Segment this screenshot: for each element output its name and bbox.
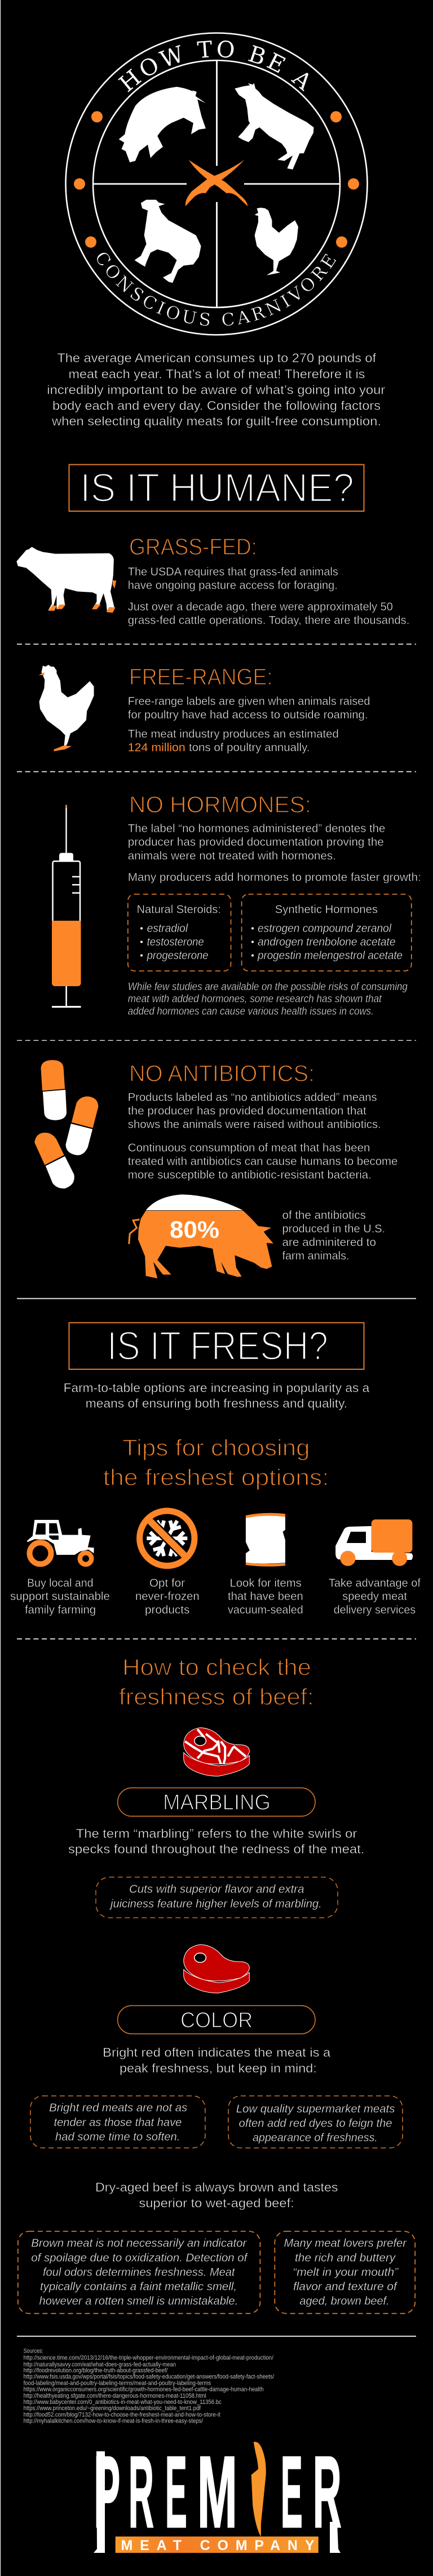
caption: Opt for (149, 1577, 185, 1589)
icon: hen (39, 665, 94, 751)
text block: sources: http://naturallysavvy.com/eat/what-does-grass-fed-actually-mean (24, 2361, 176, 2368)
icon: sheep (135, 200, 201, 283)
caption (329, 1577, 421, 1616)
caption (10, 1577, 110, 1616)
callout: bright red meats: Bright red meats are not as (49, 2102, 187, 2115)
callout: marbling note (96, 1877, 338, 1918)
text block: hormone risks note (128, 981, 408, 1017)
text block: hormone risks note: added hormones can cause various health issues in cows. (128, 1005, 374, 1017)
panel: marbling (68, 1727, 364, 1918)
caption: Take advantage of (329, 1577, 421, 1589)
callout: natural steroids (128, 894, 231, 971)
intro text: incredibly important to be aware of what’s going into your (47, 383, 385, 397)
text block: sources: http://food52.com/blog/7132-how-to-choose-the-freshest-meat-and-how-to-store-it (24, 2411, 220, 2418)
icon: red steak (184, 1945, 249, 1993)
text block: antibiotics copy: treated with antibiotics can cause humans to become (128, 1155, 397, 1168)
text block: pig stat: are adminitered to (282, 1237, 376, 1249)
chart: pig 80 percent: 80% (170, 1216, 219, 1243)
text block: hormone risks note: meat with added hormones, some research has shown that (128, 994, 382, 1005)
text block: color copy (103, 2046, 331, 2075)
text block: free-range copy: The meat industry produces an estimated (128, 728, 339, 740)
logo: premier meat company: R (313, 2435, 342, 2548)
icon: hen (255, 208, 298, 275)
heading: is it humane: IS IT HUMANE? (80, 466, 354, 511)
text block: sources: http://myhalalkitchen.com/how-to-know-if-meat-is-fresh-in-three-easy-steps/ (24, 2418, 204, 2425)
intro text (47, 351, 385, 428)
icon: pills (34, 1060, 98, 1189)
heading: how to check: freshness of beef: (119, 1684, 314, 1710)
text block: free-range copy (128, 695, 370, 754)
text block: marbling copy: The term “marbling” refers to the white swirls or (76, 1826, 357, 1840)
text block: hormone risks note: While few studies are available on the possible risks of consuming (128, 981, 408, 993)
icon: delivery truck (335, 1519, 413, 1566)
title: conscious carnivore: CONSCIOUS CARNIVORE (97, 253, 336, 326)
text block: antibiotics copy: Products labeled as “no antibiotics added” means (128, 1092, 377, 1104)
title: how to be a: HOW TO BE A (118, 41, 309, 93)
text block: sources (24, 2348, 275, 2425)
callout: natural steroids: testosterone (147, 936, 204, 948)
callout: natural steroids: estradiol (147, 922, 188, 935)
caption: that have been (228, 1590, 303, 1603)
callout: synthetic hormones: androgen trenbolone acetate (258, 936, 396, 948)
text block: pig stat: farm animals. (282, 1250, 350, 1263)
callout: synthetic hormones: progestin melengestrol acetate (257, 949, 403, 962)
caption: Look for items (230, 1577, 302, 1589)
callout: brown meat: Brown meat is not necessarily an indicator (31, 2237, 248, 2250)
text block: sources: http://healthyeating.sfgate.com/there-dangerous-hormones-meat-11058.html (24, 2393, 206, 2399)
callout: meat lovers: flavor and texture of (293, 2280, 398, 2293)
text block: antibiotics copy: shows the animals were raised without antibiotics. (128, 1118, 381, 1131)
caption: products (145, 1604, 189, 1616)
intro text: body each and every day. Consider the following factors (52, 399, 381, 413)
logo: premier meat company: E (165, 2436, 187, 2549)
text block: sources: http://www.babycenter.com/0_antibiotics-in-meat-what-you-need-to-know_11356.bc (24, 2399, 222, 2406)
icon: cow (235, 83, 313, 169)
icon: pig (119, 87, 206, 162)
heading: grass-fed: GRASS-FED: (129, 534, 257, 560)
text block: free-range copy: Free-range labels are given when animals raised (128, 695, 370, 707)
intro text: The average American consumes up to 270 pounds of (57, 351, 377, 365)
icon: knife as letter I (251, 2442, 266, 2537)
text block: hormones copy: animals were not treated with hormones. (128, 850, 336, 862)
icon: cow (16, 547, 116, 613)
heading: is it fresh: IS IT FRESH? (107, 1324, 328, 1369)
caption: speedy meat (342, 1590, 407, 1603)
caption: vacuum-sealed (228, 1604, 303, 1616)
text block: sources: https://www.princeton.edu/~greening/downloads/antibiotic_table_tent1.pdf (24, 2405, 201, 2412)
label: color: COLOR (180, 2008, 253, 2032)
label: marbling (118, 1788, 315, 1816)
intro text: meat each year. That’s a lot of meat! Therefore it is (69, 367, 365, 381)
text block: farm-to-table: Farm-to-table options are increasing in popularity as a (64, 1381, 370, 1395)
text block: antibiotics copy (128, 1092, 397, 1181)
logo: premier meat company: MEAT COMPANY (121, 2538, 315, 2553)
callout: brown meat: however a rotten smell is unmistakable. (39, 2295, 238, 2307)
callout: low quality meats (228, 2096, 403, 2148)
caption: support sustainable (10, 1590, 110, 1603)
text block: color copy: Bright red often indicates the meat is a (103, 2046, 331, 2060)
caption: never-frozen (135, 1590, 200, 1603)
text block: sources: Sources: (24, 2348, 43, 2355)
icon: crossed knives and animals (119, 83, 313, 283)
panel: grass-fed (16, 534, 409, 627)
text block: marbling copy: specks found throughout the redness of the meat. (68, 1842, 364, 1856)
chart: pig 80 percent (129, 1194, 273, 1278)
panel: no antibiotics (34, 1060, 397, 1278)
text block: dry-aged beef (95, 2180, 338, 2210)
text block: marbling copy (68, 1826, 364, 1856)
label: color (118, 2006, 315, 2034)
text block: grass-fed copy: Just over a decade ago, there were approximately 50 (128, 601, 393, 613)
caption (135, 1577, 200, 1616)
icon: syringe (52, 805, 81, 1008)
text block: sources: http://www.fsis.usda.gov/wps/portal/fsis/topics/food-safety-education/get-answers/food-safety-fact-sheets/ (24, 2373, 275, 2380)
callout: low quality meats: appearance of freshness. (253, 2132, 378, 2144)
logo: premier meat company: R (129, 2435, 154, 2549)
heading: no antibiotics: NO ANTIBIOTICS: (129, 1061, 315, 1087)
callout: natural steroids: Natural Steroids: (136, 904, 221, 916)
callout: meat lovers: Many meat lovers prefer (284, 2237, 407, 2250)
orange dots (74, 111, 359, 248)
text block: pig stat (282, 1210, 385, 1263)
text block: antibiotics copy: more susceptible to antibiotic-resistant bacteria. (128, 1169, 372, 1181)
text block: dry-aged beef: superior to wet-aged beef: (139, 2196, 294, 2210)
icon: marbled steak (184, 1727, 249, 1776)
logo: premier meat company: E (281, 2436, 303, 2549)
heading: no hormones: NO HORMONES: (129, 792, 311, 817)
caption (228, 1577, 303, 1616)
logo: premier meat company (94, 2435, 342, 2553)
callout: bright red meats: tender as those that have (54, 2116, 182, 2129)
callout: marbling note: Cuts with superior flavor and extra (129, 1883, 304, 1896)
callout: brown meat: of spoilage due to oxidization. Detection of (31, 2252, 249, 2264)
text block: sources: http://science.time.com/2013/12/16/the-triple-whopper-environmental-impact-of-global-meat-production/ (24, 2355, 274, 2362)
callout: meat lovers: “melt in your mouth” (293, 2266, 399, 2279)
callout: meat lovers: aged, brown beef. (299, 2295, 390, 2307)
text block: farm-to-table: means of ensuring both freshness and quality. (86, 1396, 347, 1410)
callout: marbling note: juiciness feature higher levels of marbling. (109, 1898, 322, 1910)
text block: grass-fed copy: grass-fed cattle operations. Today, there are thousands. (128, 614, 409, 627)
text block: hormones copy: The label “no hormones administered” denotes the (128, 823, 385, 835)
callout: brown meat (18, 2231, 260, 2314)
text block: pig stat: of the antibiotics (282, 1210, 366, 1222)
intro text: when selecting quality meats for guilt-free consumption. (51, 414, 381, 428)
heading: free-range: FREE-RANGE: (129, 663, 273, 689)
text block: antibiotics copy: Continuous consumption of meat that has been (128, 1142, 370, 1154)
text block: color copy: peak freshness, but keep in mind: (120, 2061, 317, 2075)
caption: Buy local and (27, 1577, 94, 1589)
text block: antibiotics copy: the producer has provided documentation that (128, 1105, 366, 1118)
text block: free-range copy: for poultry have had access to outside roaming. (128, 709, 368, 721)
callout: bright red meats (30, 2096, 205, 2148)
heading: tips (103, 1435, 329, 1490)
emblem: how to be a conscious carnivore (65, 32, 368, 336)
callout: synthetic hormones: estrogen compound zeranol (258, 922, 392, 935)
heading: how to check (119, 1654, 314, 1710)
callout: low quality meats: often add red dyes to feign the (239, 2117, 392, 2130)
logo: premier meat company: M (197, 2436, 237, 2548)
text block: hormones copy: Many producers add hormones to promote faster growth: (128, 871, 421, 883)
callout: brown meat: foul odors determines freshness. Meat (43, 2266, 236, 2279)
callout: meat lovers: the rich and buttery (295, 2252, 396, 2264)
text block: pig stat: produced in the U.S. (282, 1223, 385, 1235)
icon: knives (189, 160, 248, 206)
callout: synthetic hormones: Synthetic Hormones (275, 904, 378, 916)
text block: sources: http://foodrevolution.org/blog/the-truth-about-grassfed-beef/ (24, 2367, 168, 2374)
logo: premier meat company: P (94, 2435, 120, 2548)
text block: hormones copy (128, 823, 421, 883)
caption: delivery services (334, 1604, 416, 1616)
text block: grass-fed copy: have ongoing pasture access for foraging. (128, 579, 338, 592)
text block: farm-to-table (64, 1381, 370, 1410)
text block: free-range copy: 124 million (128, 742, 185, 754)
callout: brown meat: typically contains a faint metallic smell, (40, 2280, 237, 2293)
callout: bright red meats: had some time to soften. (55, 2131, 180, 2143)
icon: no frozen (140, 1511, 195, 1566)
callout: natural steroids: progesterone (147, 949, 209, 962)
panel: tips icons (10, 1511, 421, 1616)
callout: low quality meats: Low quality supermarket meats (236, 2103, 395, 2115)
text block: dry-aged beef: Dry-aged beef is always brown and tastes (95, 2180, 338, 2194)
heading: tips: the freshest options: (103, 1464, 329, 1490)
text block: grass-fed copy (128, 566, 409, 627)
icon: vacuum bag (246, 1513, 285, 1567)
icon: tractor (27, 1520, 94, 1564)
text block: hormones copy: producer has provided documentation proving the (128, 836, 384, 849)
label: marbling: MARBLING (163, 1790, 271, 1814)
text block: sources: food-labeling/meat-and-poultry-labeling-terms/meat-and-poultry-labeling-terms (24, 2380, 211, 2386)
callout: synthetic hormones (242, 894, 412, 971)
heading: tips: Tips for choosing (122, 1435, 310, 1461)
panel: free-range (39, 663, 370, 754)
panel: no hormones (52, 792, 421, 1017)
heading: how to check: How to check the (122, 1654, 311, 1680)
caption: family farming (25, 1604, 96, 1616)
panel: color (30, 1945, 403, 2148)
callout: meat lovers (275, 2231, 415, 2314)
text block: free-range copy: tons of poultry annually. (189, 742, 310, 754)
text block: sources: https://www.organicconsumers.org/scientific/growth-hormones-fed-beef-cattle-damage-human-health (24, 2386, 264, 2393)
text block: grass-fed copy: The USDA requires that grass-fed animals (128, 566, 338, 578)
